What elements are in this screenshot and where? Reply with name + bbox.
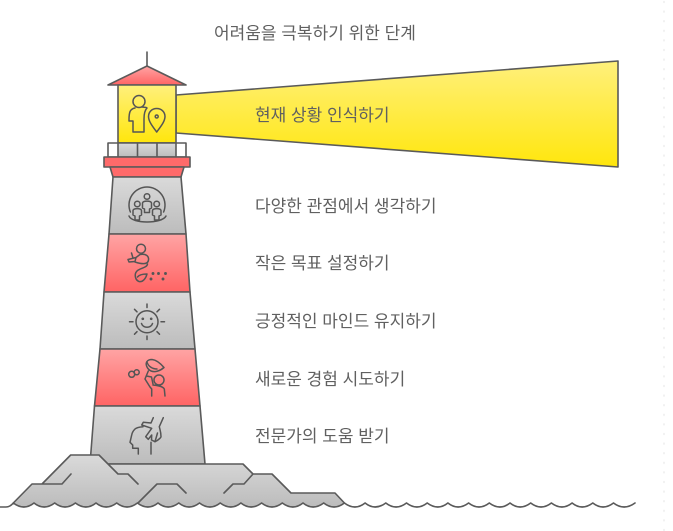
mast bbox=[146, 52, 148, 66]
step 6 label: 전문가의 도움 받기 bbox=[255, 427, 390, 446]
waves bbox=[0, 503, 635, 507]
icon: diverse perspectives group bbox=[129, 187, 166, 222]
icon: smiling sun bbox=[130, 304, 164, 340]
light beam bbox=[176, 61, 618, 167]
icon: small goals figure bbox=[128, 244, 166, 282]
icon: person and location pin bbox=[129, 96, 165, 132]
railing bbox=[108, 143, 186, 157]
icon: helping hand on head bbox=[130, 418, 163, 454]
rocks bbox=[13, 455, 344, 507]
title: 어려움을 극복하기 위한 단계 bbox=[214, 24, 416, 43]
lighthouse roof bbox=[108, 66, 186, 85]
tower section: red bbox=[104, 234, 190, 292]
tower section: red bbox=[94, 349, 200, 406]
tower section: gray bbox=[90, 406, 205, 464]
step 2 label: 다양한 관점에서 생각하기 bbox=[255, 197, 436, 216]
gallery base bbox=[110, 167, 184, 177]
gallery band bbox=[104, 157, 190, 167]
lantern room bbox=[118, 85, 176, 143]
tower section: gray bbox=[109, 177, 186, 234]
tower section: gray bbox=[100, 292, 195, 349]
step 3 label: 작은 목표 설정하기 bbox=[255, 254, 390, 273]
rock mass bbox=[13, 455, 344, 507]
rock outlines bbox=[13, 455, 344, 503]
step 5 label: 새로운 경험 시도하기 bbox=[255, 370, 405, 389]
step 4 label: 긍정적인 마인드 유지하기 bbox=[255, 312, 436, 331]
icon: person catching with net bbox=[129, 360, 165, 396]
step 1 label: 현재 상황 인식하기 bbox=[255, 106, 390, 125]
